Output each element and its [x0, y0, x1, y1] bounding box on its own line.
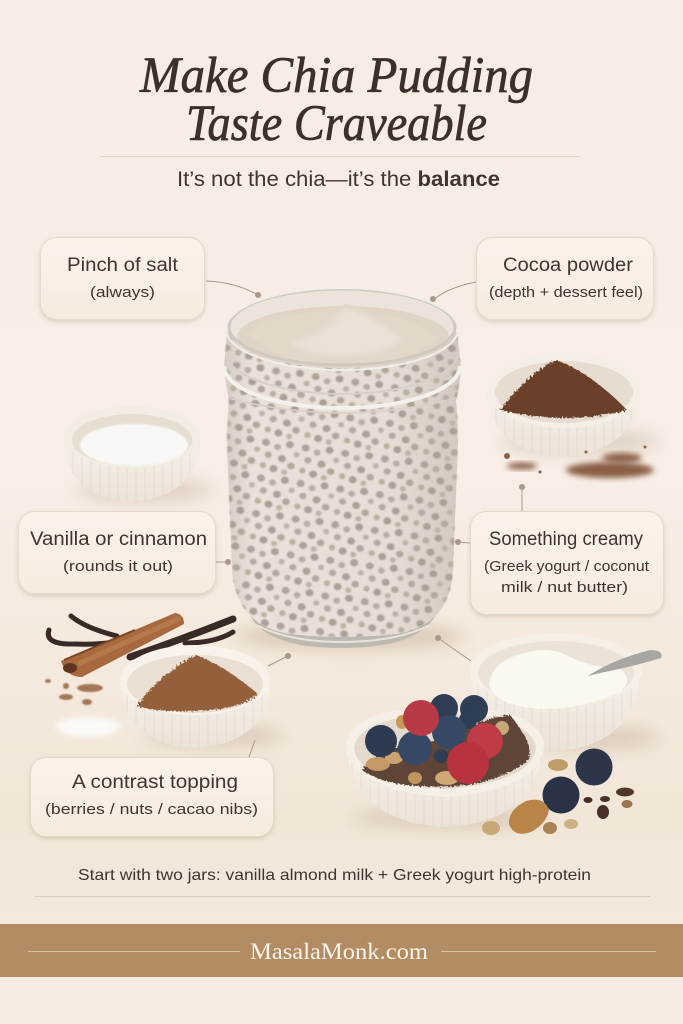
title — [139, 48, 533, 152]
callout: something creamy: Something creamy — [489, 529, 643, 550]
vanilla pods — [48, 616, 233, 657]
callout: pinch of salt — [40, 238, 204, 320]
cocoa bowl — [487, 352, 660, 457]
loose toppings — [482, 748, 634, 835]
callout: vanilla or cinnamon — [18, 512, 216, 594]
title: Taste Craveable — [186, 96, 487, 152]
callout: cocoa powder: (depth + dessert feel) — [489, 284, 643, 301]
cinnamon stick — [61, 613, 184, 677]
spilled cocoa — [504, 446, 654, 478]
yogurt bowl — [470, 633, 662, 751]
title: Make Chia Pudding — [139, 48, 533, 104]
callout: vanilla or cinnamon: Vanilla or cinnamon — [30, 529, 207, 550]
footer band — [0, 924, 683, 977]
callout: something creamy — [470, 512, 664, 614]
subtitle: It’s not the chia—it’s the balance — [177, 168, 500, 191]
topping bowl — [346, 694, 550, 828]
callout: cocoa powder — [476, 238, 654, 320]
callout: pinch of salt: Pinch of salt — [67, 255, 179, 276]
salt bowl — [64, 406, 213, 502]
footer note: Start with two jars: vanilla almond milk + Greek yogurt high-protein — [78, 867, 591, 884]
callout: contrast topping — [30, 758, 274, 836]
callout: cocoa powder: Cocoa powder — [503, 255, 634, 276]
footer band: MasalaMonk.com — [250, 939, 428, 964]
spilled spices and salt — [45, 679, 120, 737]
callout connectors — [206, 281, 524, 757]
callout: contrast topping: A contrast topping — [72, 772, 238, 793]
callout: pinch of salt: (always) — [90, 284, 155, 301]
callout: something creamy: milk / nut butter) — [501, 579, 628, 596]
jar of chia pudding — [224, 288, 465, 650]
callout: vanilla or cinnamon: (rounds it out) — [63, 558, 173, 575]
callout: something creamy: (Greek yogurt / coconut — [484, 558, 650, 575]
callout: contrast topping: (berries / nuts / cacao nibs) — [45, 801, 258, 818]
cinnamon bowl — [120, 645, 285, 748]
